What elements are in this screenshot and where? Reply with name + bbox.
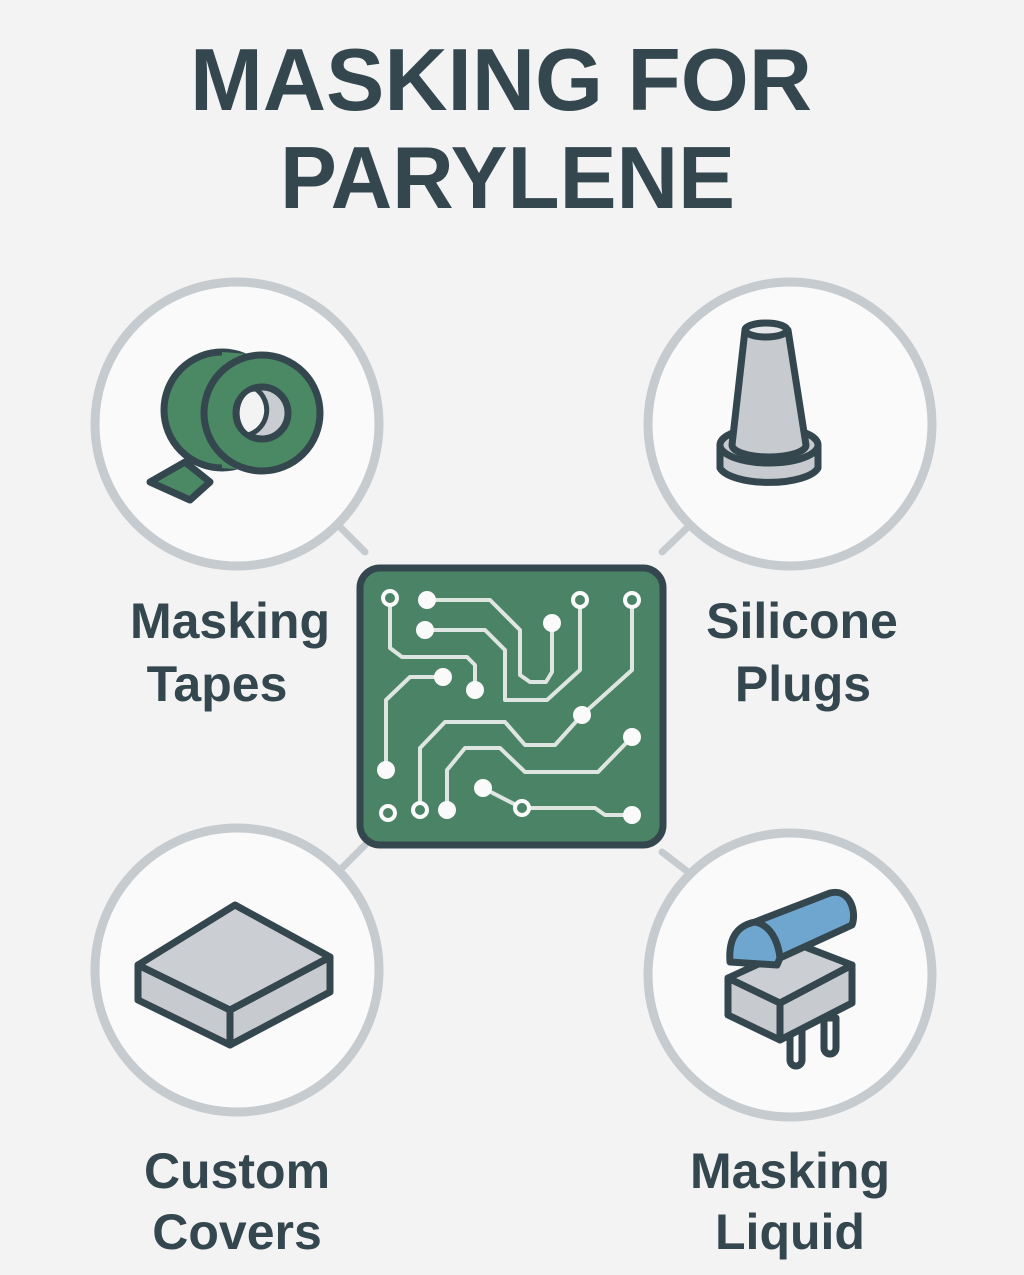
title: PARYLENE (280, 128, 735, 227)
connectors (340, 527, 688, 872)
label: masking liquid: Masking (690, 1143, 890, 1199)
title: MASKING FOR (190, 30, 812, 129)
panel: silicone plugs circle (648, 282, 932, 566)
label: masking tapes: Masking (130, 593, 330, 649)
icon: tape roll (150, 352, 320, 500)
icon: silicone plug (720, 323, 818, 482)
label: masking tapes: Tapes (147, 656, 287, 712)
label: silicone plugs: Plugs (735, 656, 871, 712)
labels (130, 593, 898, 1260)
panel: PCB (360, 568, 663, 845)
title (190, 30, 812, 227)
label: custom covers: Custom (144, 1143, 330, 1199)
panel: custom covers circle (95, 828, 379, 1112)
label: masking liquid: Liquid (715, 1204, 865, 1260)
icon: masking liquid component (728, 892, 854, 1066)
label: custom covers: Covers (152, 1204, 322, 1260)
icon: cover box (138, 905, 330, 1045)
traces (386, 598, 632, 815)
panel: masking liquid circle (648, 833, 932, 1117)
panel: masking tapes circle (95, 282, 379, 566)
label: silicone plugs: Silicone (706, 593, 898, 649)
